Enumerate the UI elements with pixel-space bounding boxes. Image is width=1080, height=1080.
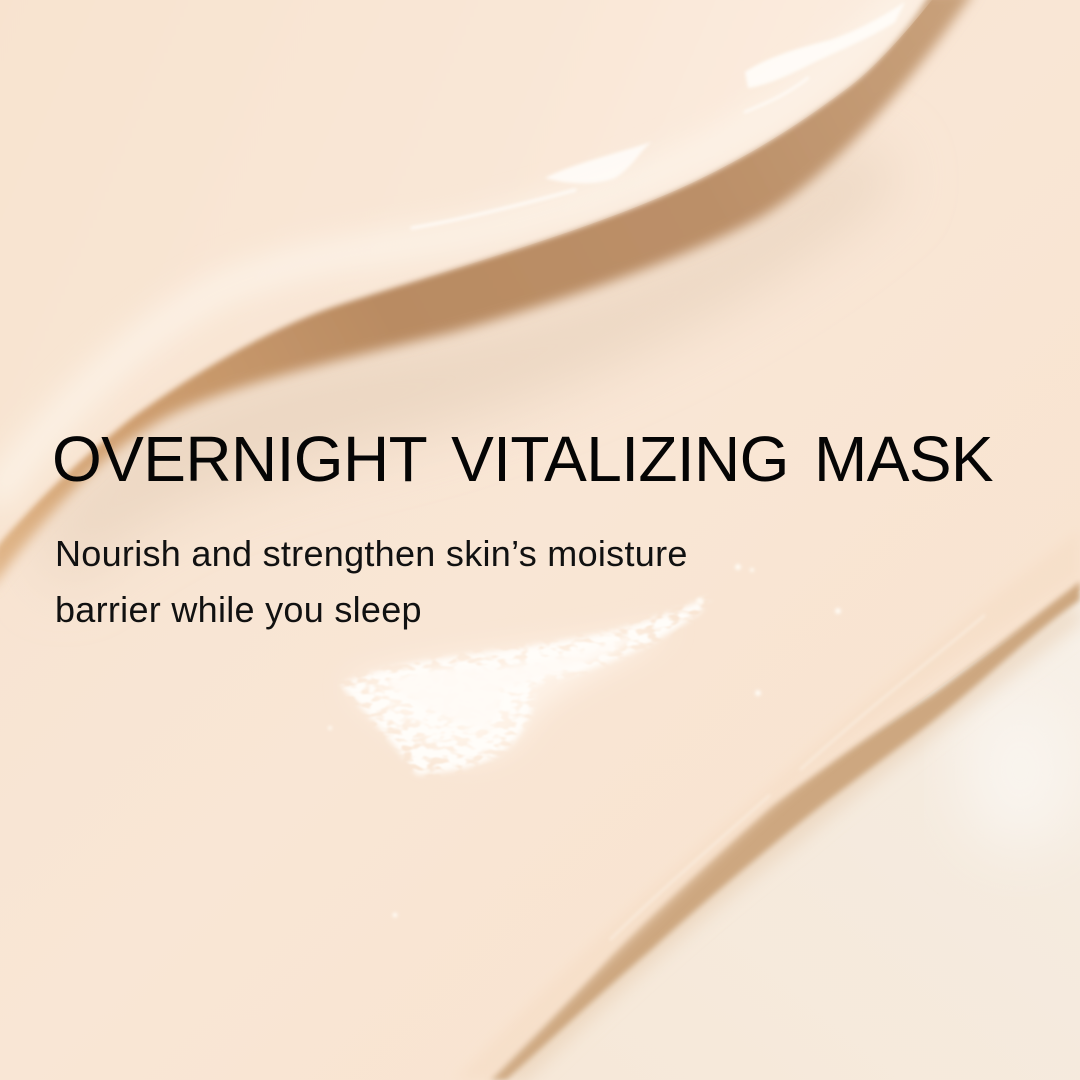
glossy highlight: top right streak [745, 78, 808, 112]
lower right pale cream area [490, 590, 1080, 1080]
glossy highlight: long lip streak [412, 190, 575, 228]
lower fold band tint [455, 530, 1080, 1080]
subtitle [55, 533, 688, 630]
glossy highlight: middle blob [545, 142, 652, 183]
glossy highlight: centre soft glow [350, 625, 670, 759]
subtitle: barrier while you sleep [55, 589, 422, 630]
glossy sparkles around the centre highlight [328, 564, 841, 918]
lower right pale glow [960, 690, 1080, 850]
upper fold: pale lip band [0, 0, 905, 490]
glossy highlight: centre core [385, 632, 640, 728]
lower fold ridge highlight [610, 615, 985, 940]
glossy highlight: top right blob [745, 2, 905, 88]
title: OVERNIGHT VITALIZING MASK [52, 423, 993, 495]
lower fold shadow line [490, 581, 1080, 1080]
upper fold shadow band [0, 0, 975, 590]
lower fold soft falloff [510, 610, 1080, 1080]
upper fold: smooth cream lobe [0, 0, 932, 555]
glossy highlight: centre speckle [340, 597, 710, 775]
subtitle: Nourish and strengthen skin’s moisture [55, 533, 688, 574]
soft shade below the upper fold [40, 140, 900, 590]
